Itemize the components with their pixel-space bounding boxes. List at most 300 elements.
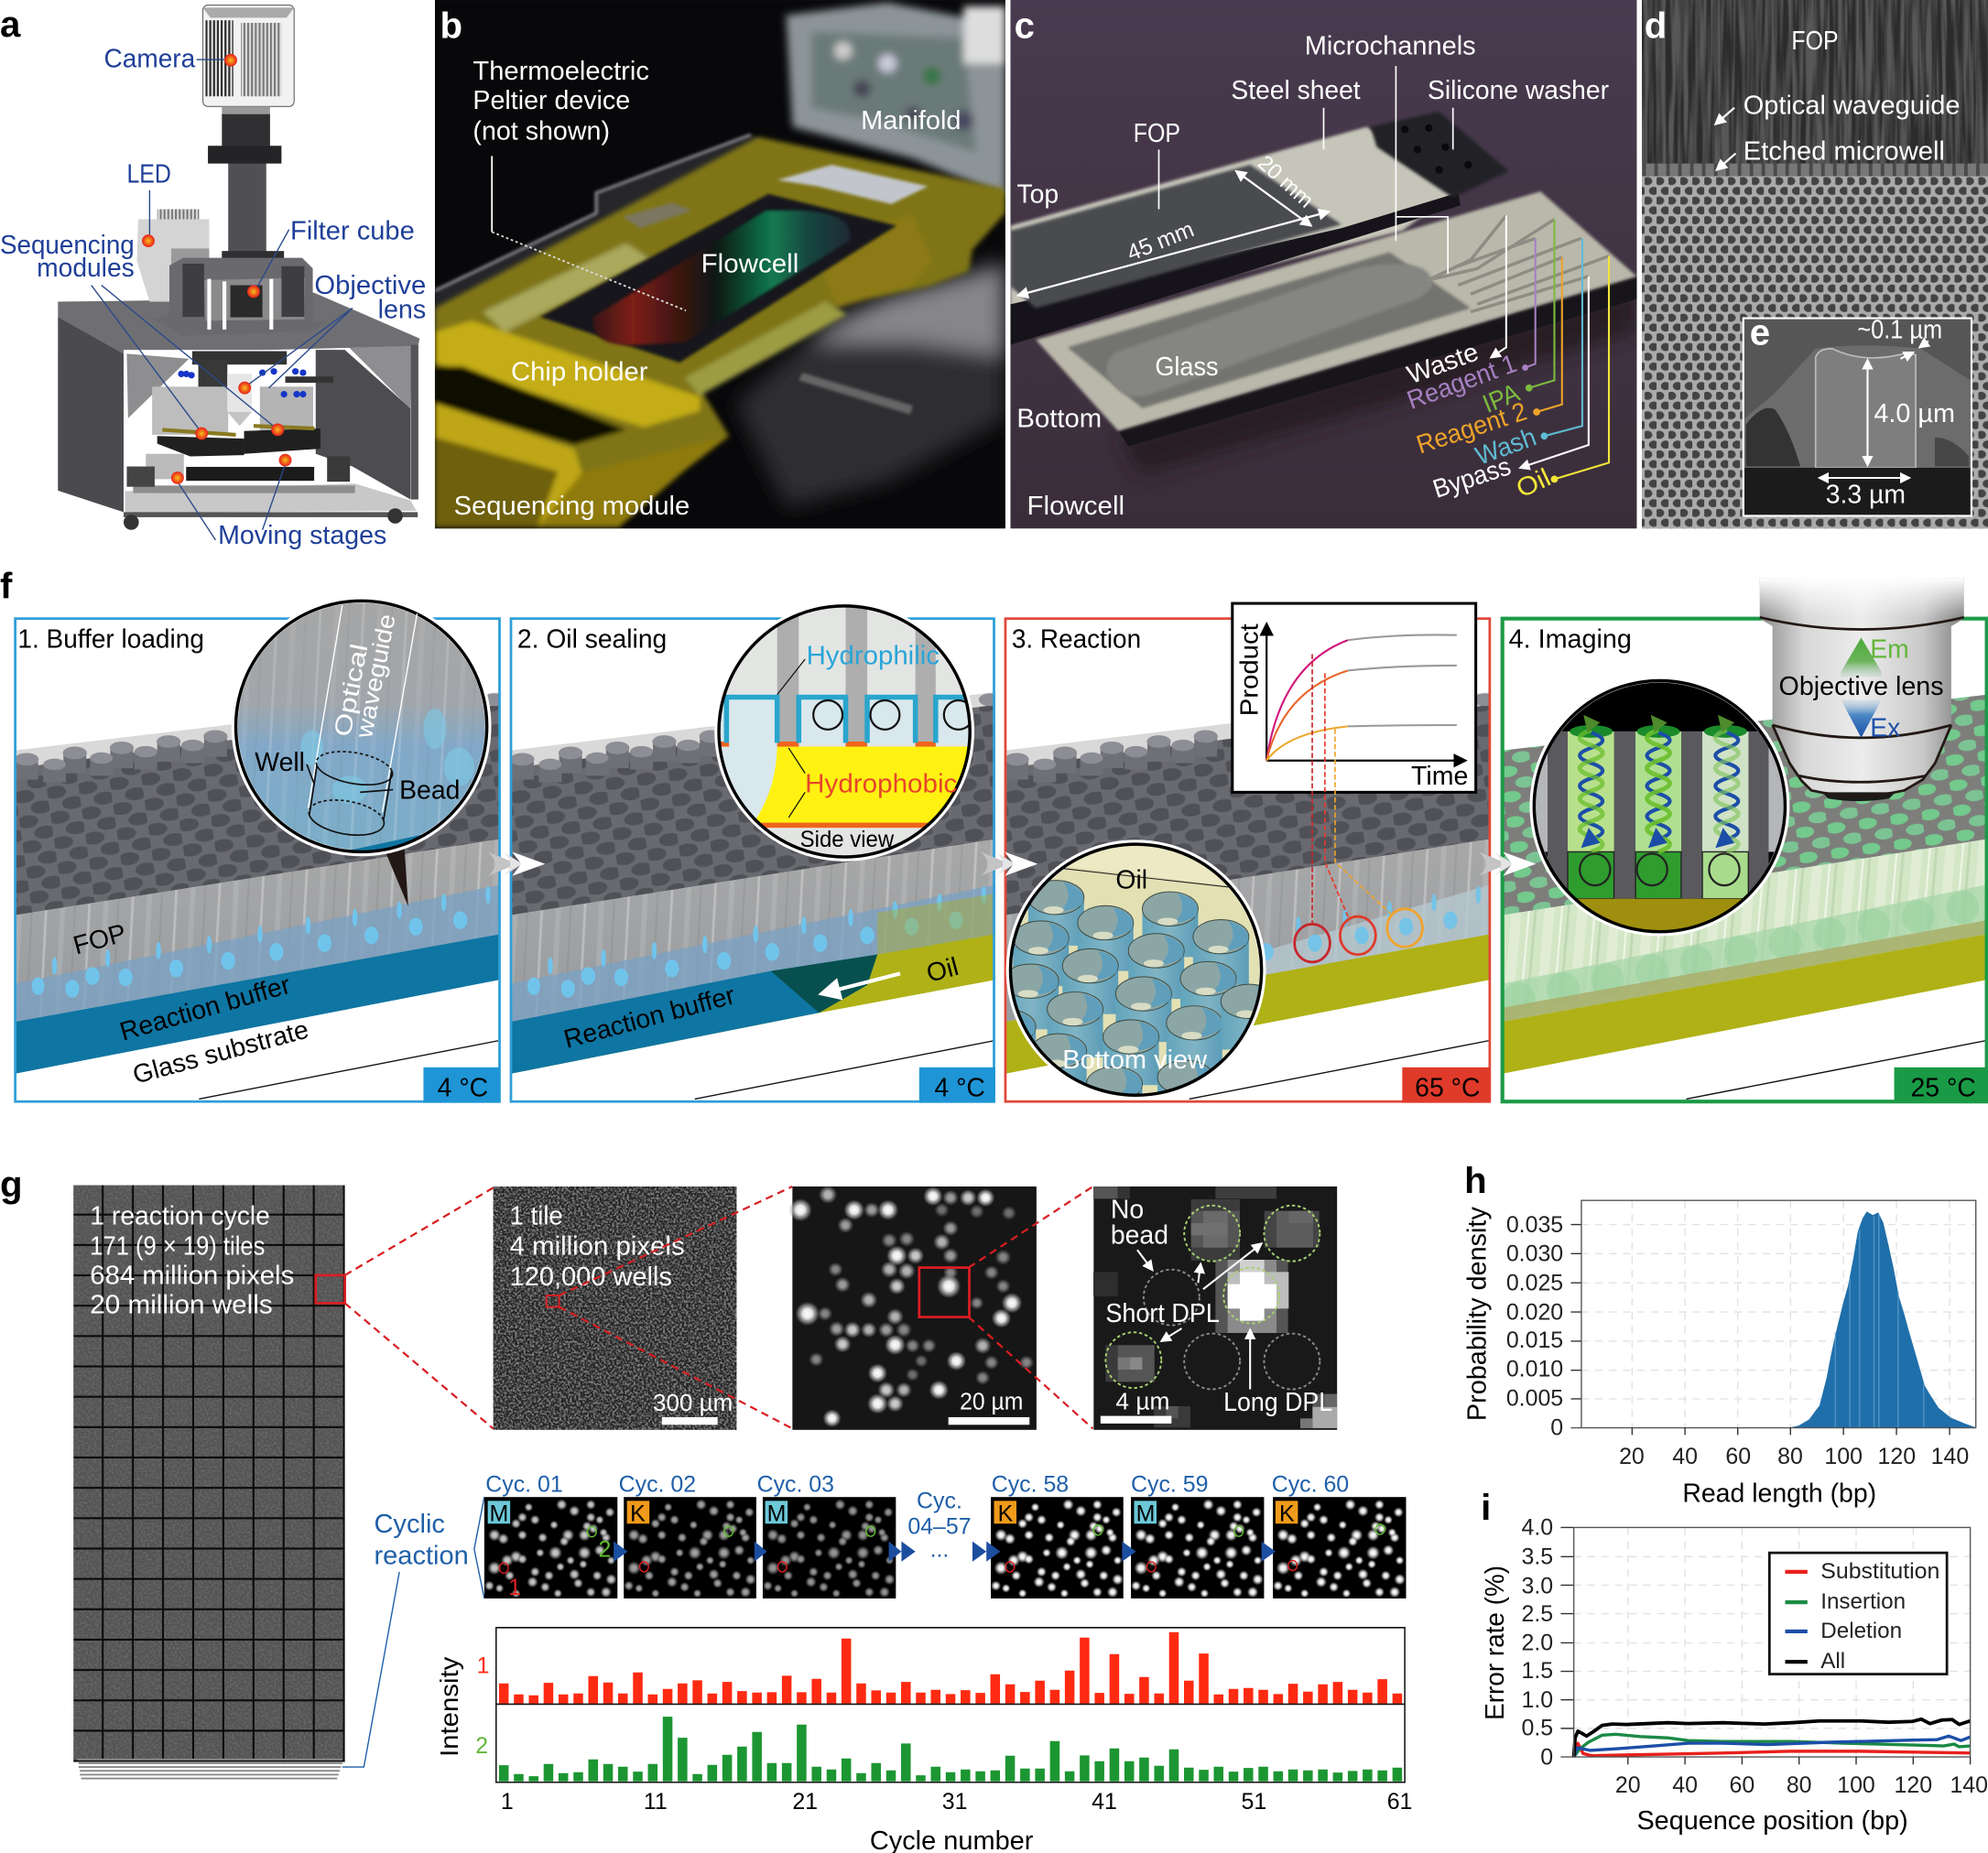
- hydrophilic walls: [726, 698, 983, 742]
- well numbers: 2: [599, 1536, 611, 1562]
- fluorescent spots: [788, 1186, 1034, 1427]
- labels panel b: Peltier device: [473, 86, 630, 115]
- well pillar: [1816, 349, 1916, 468]
- time axis: [1266, 760, 1466, 762]
- pixel labels: Long DPL: [1223, 1388, 1332, 1417]
- width arrow: [1820, 477, 1909, 479]
- dark background: [435, 0, 1005, 528]
- LED module: [137, 209, 209, 302]
- scale bar: [662, 1417, 718, 1425]
- panel label f: f: [0, 566, 13, 607]
- panel g: tile image: [494, 1187, 736, 1430]
- temperature 3: [1402, 1067, 1490, 1103]
- dimension arrows: [1018, 171, 1329, 296]
- x tick labels: 120: [1878, 1444, 1916, 1469]
- axis labels: [1463, 1206, 1876, 1509]
- drop shadow: [1118, 286, 1636, 475]
- y tick labels: 0.020: [1506, 1299, 1563, 1325]
- base badges: K: [630, 1501, 646, 1527]
- base badges: M: [489, 1501, 508, 1527]
- x tick labels: 51: [1241, 1789, 1266, 1815]
- axis labels: [1481, 1566, 1908, 1836]
- error curves: [1574, 1719, 1971, 1757]
- axis labels: [1234, 623, 1468, 791]
- emission arrowheads: [1583, 715, 1734, 732]
- labels magnifier 3: [1062, 866, 1208, 1075]
- panel g: full flowcell image: [73, 1186, 345, 1779]
- paper tag: [777, 165, 929, 204]
- y tick labels: 3.0: [1521, 1573, 1553, 1598]
- panel g: spot image: [788, 1186, 1037, 1430]
- rotated port labels: Bypass: [1429, 451, 1515, 504]
- arrow to waveguide: [1715, 108, 1734, 125]
- panel d: FOP electron micrograph: [1642, 0, 1988, 528]
- labels panel d: Optical waveguide: [1744, 92, 1961, 121]
- base badges: M: [767, 1501, 786, 1527]
- emission arrow: [1841, 637, 1882, 677]
- axis labels: Probability density: [1463, 1206, 1493, 1421]
- lens labels: [1779, 635, 1944, 742]
- base badges: K: [998, 1501, 1014, 1527]
- x tick labels: 80: [1777, 1444, 1803, 1469]
- axis labels: Read length (bp): [1682, 1479, 1876, 1509]
- border: [1744, 319, 1972, 516]
- plot frame: [1570, 1200, 1976, 1428]
- arrow short DPL down: [1161, 1328, 1181, 1341]
- top plate (steel sheet): [1011, 125, 1451, 304]
- labels magnifier 2: Hydrophilic: [807, 642, 940, 671]
- y tick labels: 0: [1540, 1744, 1553, 1770]
- dashed connectors: [1312, 654, 1391, 928]
- microchannels: [1428, 215, 1609, 312]
- transition arrow 3: [1479, 851, 1536, 876]
- labels panel d: [1744, 27, 1961, 166]
- chart frame: [496, 1628, 1405, 1783]
- inset panel e: [1744, 312, 1972, 516]
- title 4: 4. Imaging: [1509, 625, 1632, 655]
- panel label i: i: [1481, 1487, 1491, 1528]
- microscope column: [208, 114, 284, 266]
- step 3: reaction: [980, 603, 1496, 1132]
- x tick labels: 21: [792, 1789, 818, 1815]
- y tick labels: [1506, 1212, 1563, 1440]
- magnifier 1: [234, 600, 488, 853]
- labels magnifier 2: [800, 642, 957, 852]
- oil: [752, 747, 973, 825]
- labels panel e: 3.3 µm: [1826, 481, 1906, 510]
- selected tile: [316, 1275, 345, 1303]
- magnifier 4: [1527, 679, 1794, 939]
- cycle 03: [763, 1497, 896, 1598]
- labels panel a: lens: [378, 296, 426, 325]
- well and bead labels: Bead: [399, 775, 460, 805]
- rotated port labels: IPA: [1479, 378, 1524, 419]
- labels panel e: [1826, 316, 1955, 510]
- ticks: [1560, 1527, 1971, 1764]
- zoom connector lines: [345, 1187, 1092, 1428]
- green bars (well 2): [499, 1717, 1402, 1782]
- labels panel b: [454, 57, 961, 521]
- labels panel c: 20 mm: [1254, 150, 1319, 212]
- title 2: 2. Oil sealing: [517, 625, 667, 655]
- legend keys: [1785, 1572, 1808, 1662]
- x tick labels: 100: [1824, 1444, 1863, 1469]
- x tick labels: 31: [942, 1789, 967, 1815]
- scale label: 20 µm: [960, 1388, 1023, 1415]
- labels panel a: Sequencing: [0, 231, 135, 260]
- excitation arrowheads: [1581, 828, 1734, 848]
- labels magnifier 2: Hydrophobic: [805, 769, 957, 798]
- labels panel a: Moving stages: [218, 521, 386, 550]
- cycle labels: Cyc. 03: [757, 1472, 834, 1498]
- y tick labels: 0.030: [1506, 1241, 1563, 1267]
- legend labels: Deletion: [1820, 1619, 1902, 1643]
- temperature 1: 4 °C: [438, 1074, 488, 1103]
- cycle 01: [484, 1497, 617, 1598]
- background metal: [736, 260, 1005, 507]
- temperature 1: [423, 1067, 500, 1103]
- cycle 02: [624, 1497, 756, 1598]
- tile mosaic: [73, 1186, 345, 1762]
- labels panel c: [1016, 32, 1609, 521]
- pixel labels: No: [1111, 1196, 1144, 1225]
- gridlines: [1573, 1527, 1971, 1757]
- filter block: [231, 286, 263, 318]
- tile grid: [73, 1186, 345, 1762]
- labels slab 1: Glass substrate: [130, 1015, 311, 1090]
- x tick labels: 140: [1931, 1444, 1969, 1469]
- labels slab 2: Oil: [923, 952, 961, 989]
- rotated port labels: Reagent 1: [1403, 349, 1521, 416]
- axis labels: Product: [1234, 623, 1263, 716]
- panel b: sequencing module photo: [435, 0, 1005, 528]
- labels panel c: Microchannels: [1305, 32, 1476, 61]
- red bars (well 1): [499, 1632, 1402, 1704]
- stacked cycles: [77, 1760, 342, 1779]
- x tick labels: 120: [1895, 1772, 1932, 1798]
- labels panel e: ~0.1 µm: [1857, 316, 1942, 345]
- slab 2: [510, 692, 1002, 1099]
- labels panel c: Glass: [1155, 352, 1219, 382]
- labels magnifier 2: Side view: [800, 827, 895, 852]
- flowcell: [593, 211, 850, 345]
- x tick labels: 20: [1619, 1444, 1645, 1469]
- printed label: [623, 203, 692, 228]
- height arrow: [1866, 360, 1868, 465]
- panel label a: a: [0, 4, 21, 45]
- sensor markers: [142, 54, 291, 484]
- panel label c: c: [1015, 5, 1035, 47]
- cycle labels: Cyc. 58: [992, 1472, 1069, 1498]
- legend: [1769, 1553, 1947, 1674]
- cycle 59: [1131, 1497, 1264, 1598]
- micrograph shading: [1744, 320, 1971, 467]
- title 1: 1. Buffer loading: [17, 625, 204, 655]
- x tick labels: 40: [1672, 1772, 1698, 1798]
- beads: [1580, 854, 1740, 885]
- labels panel d: FOP: [1791, 27, 1839, 56]
- y tick labels: 4.0: [1521, 1515, 1553, 1541]
- mosaic labels: [90, 1202, 294, 1319]
- legend labels: All: [1820, 1649, 1845, 1674]
- well tags: [475, 1653, 489, 1759]
- rotated port labels: Oil: [1512, 463, 1555, 504]
- labels slab 1: Reaction buffer: [116, 970, 294, 1046]
- x tick labels: 60: [1730, 1772, 1754, 1798]
- base badges: M: [1136, 1501, 1155, 1527]
- substrate: [1744, 468, 1971, 515]
- cycle labels: Cyc. 01: [485, 1472, 563, 1498]
- labels panel d: Etched microwell: [1744, 136, 1945, 166]
- metal rail: [435, 135, 786, 332]
- well numbers: 1: [508, 1575, 521, 1600]
- labels panel b: Flowcell: [701, 250, 798, 279]
- pointer: [386, 848, 408, 906]
- y tick labels: 1.5: [1521, 1658, 1553, 1684]
- waveguide text: Optical: [329, 642, 374, 739]
- step 2: oil sealing: [510, 596, 1002, 1103]
- pixel labels: [1105, 1196, 1332, 1417]
- base badges: [488, 1501, 1298, 1527]
- labels panel a: Camera: [104, 44, 195, 73]
- purple background: [1010, 0, 1636, 528]
- labels panel c: Flowcell: [1027, 492, 1124, 521]
- labels panel a: Objective: [314, 271, 426, 300]
- tile labels: 4 million pixels: [510, 1232, 685, 1262]
- plot frame: [1560, 1527, 1971, 1757]
- panel label b: b: [440, 5, 462, 47]
- labels panel c: FOP: [1134, 119, 1180, 148]
- callout lines: [92, 60, 353, 540]
- etched wells row: [1642, 164, 1988, 176]
- panel c: flowcell photo: [1010, 0, 1636, 528]
- panel g: pixel image: [1093, 1187, 1337, 1430]
- rotated port labels: Wash: [1472, 422, 1540, 471]
- FOP block: [1010, 165, 1342, 308]
- temperature 2: 4 °C: [934, 1074, 985, 1103]
- cycle arrows: [614, 1542, 1276, 1562]
- temperature 4: 25 °C: [1911, 1074, 1976, 1103]
- x tick labels: 100: [1837, 1772, 1875, 1798]
- x tick labels: 60: [1725, 1444, 1751, 1469]
- temperature 4: [1895, 1067, 1988, 1103]
- chip window: [540, 194, 896, 363]
- DNA helices green: [1580, 731, 1738, 851]
- cyclic reaction label: [374, 1510, 469, 1571]
- axis labels: Error rate (%): [1481, 1566, 1510, 1720]
- excitation arrow: [1841, 699, 1882, 738]
- frame 3: [1005, 619, 1490, 1101]
- oil direction arrow: [821, 973, 900, 994]
- panel h: read length histogram: [1463, 1160, 1976, 1509]
- x tick labels: 80: [1787, 1772, 1812, 1798]
- beads: [813, 700, 973, 730]
- legend labels: Insertion: [1820, 1589, 1906, 1614]
- panel label e: e: [1750, 312, 1770, 353]
- waveguide region: [1642, 0, 1988, 165]
- y tick labels: 0.005: [1506, 1386, 1563, 1412]
- labels slab 2: Reaction buffer: [560, 981, 738, 1055]
- temperature 2: [919, 1067, 995, 1103]
- labels magnifier 3: Bottom view: [1062, 1046, 1208, 1075]
- transition arrow 1: [488, 851, 545, 876]
- product chart: [1233, 603, 1476, 792]
- selected wells: [1295, 909, 1422, 962]
- y tick labels: 0.015: [1506, 1327, 1563, 1353]
- x tick labels: 11: [644, 1789, 668, 1815]
- chip holder: [435, 137, 1005, 527]
- x tick labels: [501, 1789, 1412, 1815]
- labels panel a: Filter cube: [290, 217, 415, 246]
- step 4: imaging: [1503, 578, 1988, 1103]
- y tick labels: 0.025: [1506, 1271, 1563, 1296]
- labels panel c: 45 mm: [1124, 216, 1198, 266]
- frame 2: [511, 619, 994, 1101]
- panel label d: d: [1645, 5, 1667, 47]
- filter cube bracket: [153, 258, 327, 336]
- labels panel a: modules: [37, 254, 135, 283]
- x tick labels: [1619, 1444, 1969, 1469]
- cyclic reaction label: Cyclic: [374, 1510, 445, 1539]
- labels slab 2: [560, 952, 961, 1055]
- frame 4: [1503, 619, 1987, 1101]
- tracked wells: [499, 1524, 1385, 1573]
- lens labels: Em: [1870, 635, 1909, 665]
- arrow short DPL right: [1203, 1243, 1262, 1289]
- labels slab 1: [71, 918, 311, 1090]
- y tick labels: 2.5: [1521, 1601, 1553, 1627]
- pixel labels: Short DPL: [1105, 1299, 1220, 1328]
- labels panel b: Manifold: [861, 106, 961, 135]
- tile noise: [494, 1187, 736, 1430]
- cycle labels: ...: [930, 1536, 949, 1562]
- DNA helices blue: [1580, 732, 1738, 840]
- y tick labels: 1.0: [1521, 1687, 1553, 1713]
- well tags: 1: [477, 1653, 489, 1679]
- labels magnifier 3: Oil: [1115, 866, 1147, 895]
- leader lines: [492, 156, 686, 310]
- x tick labels: 40: [1672, 1444, 1698, 1469]
- title 3: 3. Reaction: [1012, 625, 1141, 655]
- panel a: instrument drawing: [0, 4, 426, 550]
- glass chamber: [1068, 253, 1471, 408]
- y tick labels: 3.5: [1521, 1544, 1553, 1570]
- slab 4: [1503, 695, 1987, 1099]
- labels panel c: Steel sheet: [1231, 76, 1361, 105]
- cyclic reaction label: reaction: [374, 1542, 469, 1571]
- cycle 60: [1273, 1497, 1406, 1598]
- panel label g: g: [0, 1164, 23, 1205]
- labels panel e: 4.0 µm: [1874, 399, 1955, 428]
- mosaic labels: 684 million pixels: [90, 1262, 294, 1291]
- x tick labels: 1: [501, 1789, 514, 1815]
- arrow no bead: [1137, 1250, 1153, 1270]
- labels panel a: LED: [126, 159, 171, 189]
- x tick labels: 140: [1950, 1772, 1988, 1798]
- legend labels: [1820, 1559, 1939, 1674]
- panel g: intensity bar chart: [435, 1628, 1412, 1853]
- cycle labels: Cyc.: [917, 1489, 962, 1514]
- labels panel c: Top: [1016, 180, 1059, 210]
- x tick labels: 20: [1615, 1772, 1641, 1798]
- mosaic labels: 20 million wells: [90, 1290, 273, 1319]
- divider: [496, 1703, 1405, 1705]
- cycle labels: Cyc. 02: [619, 1472, 696, 1498]
- slab 3: [1005, 692, 1496, 1099]
- rotated port labels: [1403, 338, 1555, 504]
- lens labels: Ex: [1870, 713, 1900, 742]
- frame 1: [16, 619, 500, 1101]
- step 1: buffer loading: [15, 600, 505, 1103]
- arrow short DPL up: [1198, 1263, 1200, 1283]
- hydrophobic layers: [720, 742, 940, 828]
- base badges: K: [1279, 1501, 1295, 1527]
- waveguide lines: [308, 604, 418, 813]
- well cylinder: [307, 752, 393, 835]
- thickness arrow bottom: [1900, 352, 1913, 359]
- magnifier 3: [980, 843, 1276, 1132]
- pixels: [1093, 1187, 1337, 1428]
- gridlines: [1581, 1200, 1975, 1427]
- labels panel a: [0, 44, 426, 550]
- tile labels: 120,000 wells: [510, 1262, 672, 1292]
- axes: [1266, 623, 1267, 761]
- labels slab 1: FOP: [71, 918, 129, 960]
- well numbers: [508, 1536, 611, 1600]
- panel i: error rate chart: [1481, 1487, 1988, 1836]
- honeycomb region: [1642, 168, 1988, 528]
- tile labels: 1 tile: [510, 1202, 563, 1231]
- waveguide text: waveguide: [350, 612, 401, 741]
- mosaic labels: 171 (9 × 19) tiles: [90, 1232, 265, 1262]
- cycle labels: Cyc. 59: [1131, 1472, 1208, 1498]
- labels panel b: Chip holder: [511, 357, 648, 386]
- y tick labels: 0.035: [1506, 1212, 1563, 1238]
- gap shadow: [1010, 192, 1461, 345]
- temperature 3: 65 °C: [1415, 1074, 1480, 1103]
- slab 1: [15, 692, 505, 1099]
- rotated port labels: Reagent 2: [1413, 396, 1530, 460]
- well and bead labels: Well: [255, 748, 305, 777]
- cycle 58: [991, 1497, 1124, 1598]
- scale bar: [1101, 1416, 1171, 1424]
- y tick labels: 0.5: [1521, 1715, 1553, 1740]
- axis labels: Time: [1411, 762, 1468, 791]
- leader lines: [777, 659, 805, 818]
- transition arrow 2: [981, 851, 1037, 876]
- y tick labels: 2.0: [1521, 1631, 1553, 1656]
- x tick labels: 61: [1387, 1789, 1412, 1815]
- well tags: 2: [475, 1733, 488, 1759]
- magnifier 2: [716, 596, 983, 858]
- axis labels: Sequence position (bp): [1636, 1806, 1908, 1836]
- well and bead labels: [255, 748, 460, 805]
- labels panel b: Sequencing module: [454, 492, 690, 521]
- histogram: [1788, 1211, 1976, 1428]
- y tick labels: 0: [1550, 1414, 1563, 1440]
- x tick labels: [1615, 1772, 1988, 1798]
- bottom plate side: [1118, 276, 1636, 446]
- manifold: [786, 3, 1005, 197]
- tile texture: [73, 1186, 345, 1762]
- labels panel c: Bottom: [1016, 405, 1102, 434]
- labels panel b: (not shown): [473, 116, 610, 146]
- tile labels: [510, 1202, 733, 1416]
- dashed well outlines: [1105, 1206, 1320, 1390]
- instrument cabinet: [58, 286, 419, 530]
- tile labels: 300 µm: [653, 1389, 733, 1416]
- legend labels: Substitution: [1820, 1559, 1939, 1584]
